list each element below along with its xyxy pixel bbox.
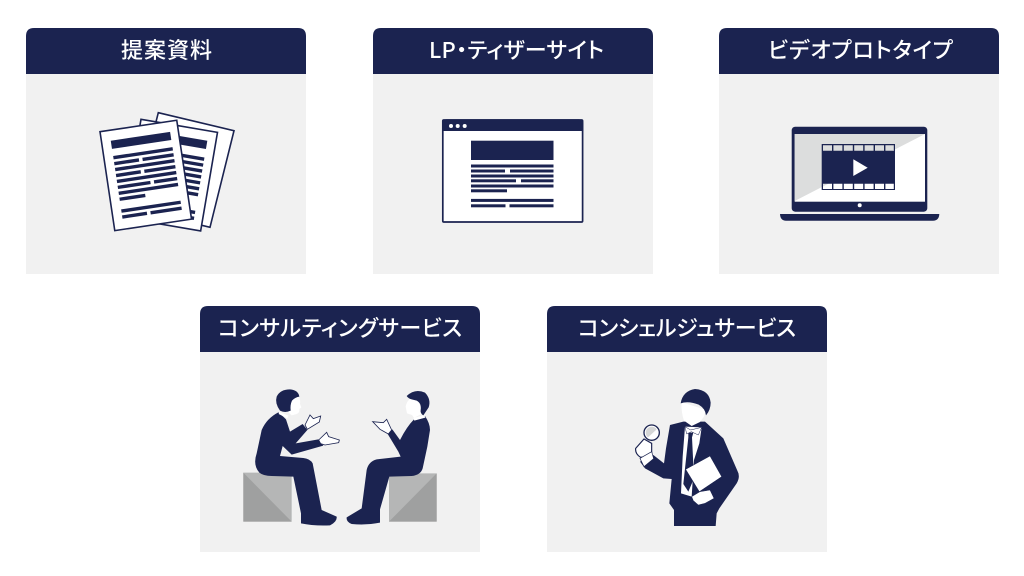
panel: コンサルティングサービス: コンサルティングサービス bbox=[218, 311, 462, 343]
panel: LP・ティザーサイト bbox=[373, 28, 653, 274]
panel: ビデオプロトタイプ bbox=[719, 28, 999, 274]
panel: コンシェルジュサービス: コンシェルジュサービス bbox=[578, 311, 796, 343]
panel: 提案資料: 提案資料 bbox=[121, 33, 212, 65]
panel: コンサルティングサービス bbox=[200, 306, 480, 552]
panel: 提案資料 bbox=[26, 28, 306, 274]
panel: ビデオプロトタイプ: ビデオプロトタイプ bbox=[768, 33, 953, 65]
panel: コンシェルジュサービス bbox=[547, 306, 827, 552]
panel: LP・ティザーサイト: LP・ティザーサイト bbox=[429, 33, 604, 65]
